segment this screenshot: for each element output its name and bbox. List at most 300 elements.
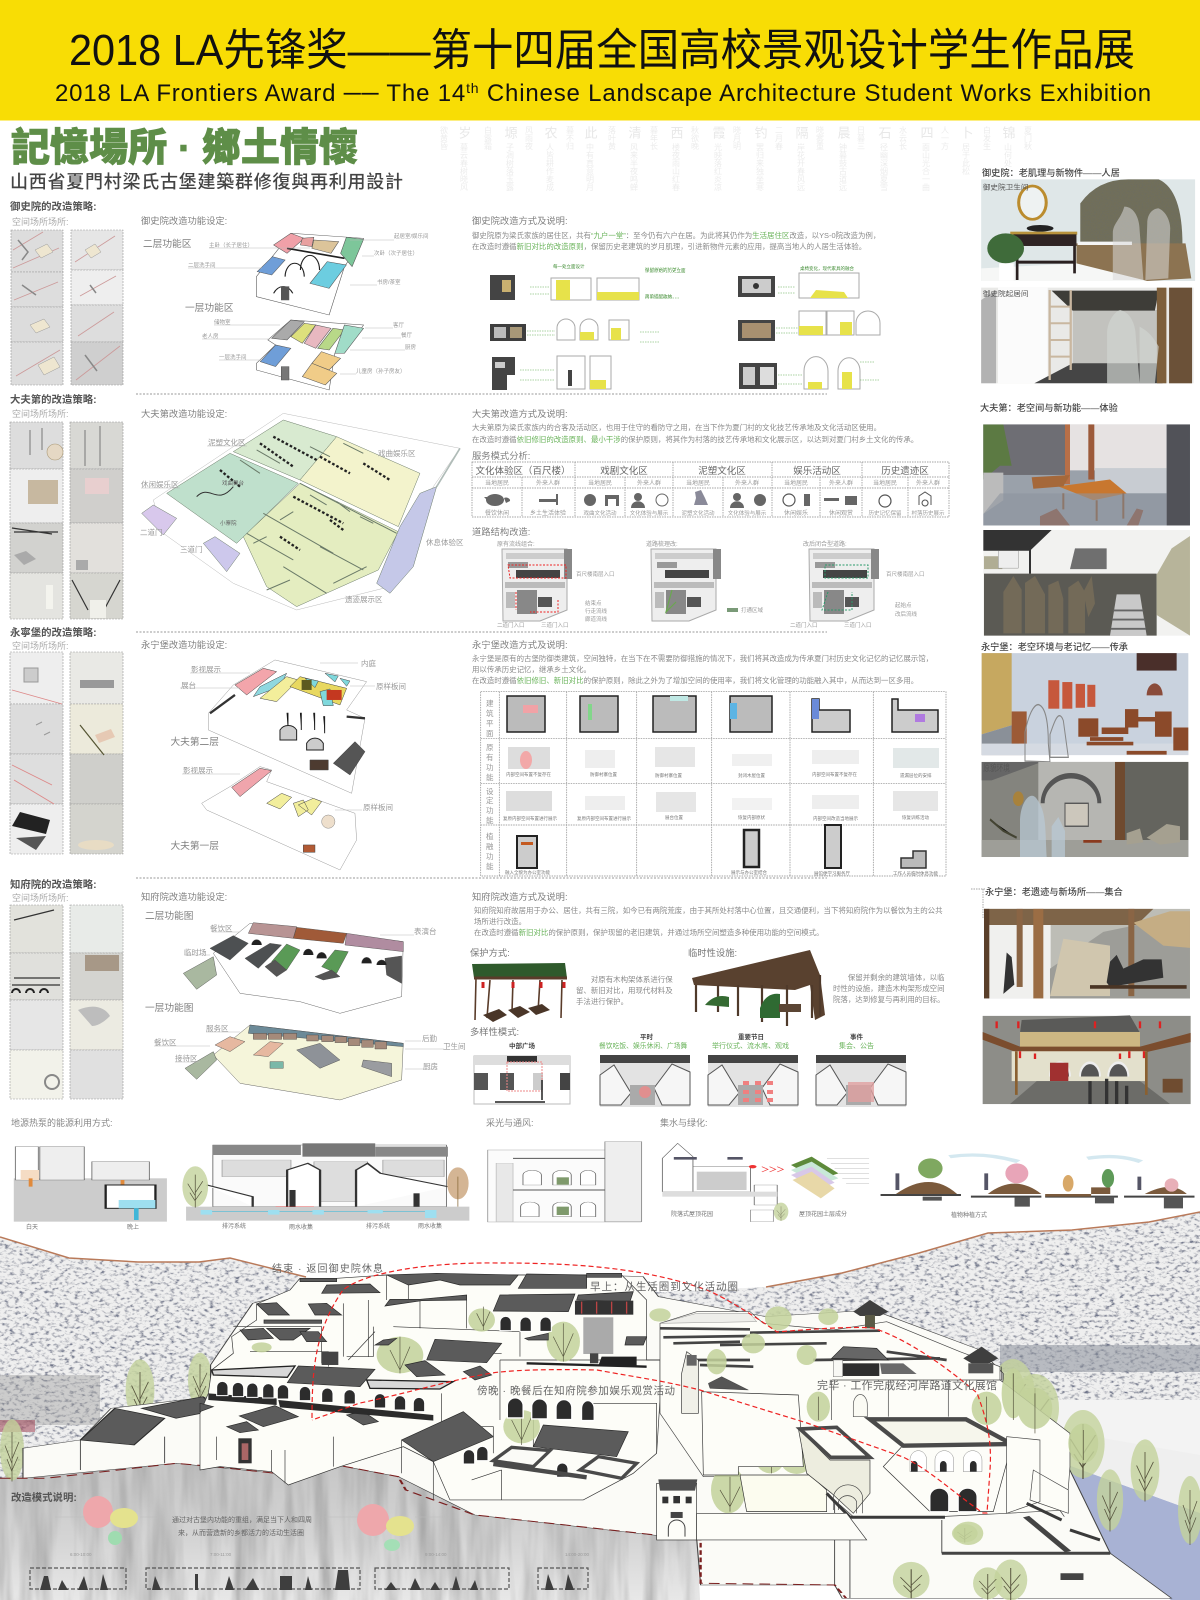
ghost poem background text: 岸花开春风远 xyxy=(796,143,806,192)
ghost poem background text: 暮不归 xyxy=(566,125,574,151)
arched facade xyxy=(910,1451,982,1472)
title: English: Chinese Landscape Architecture Student Works Exhibition xyxy=(479,80,1152,107)
small gate tower xyxy=(657,1483,697,1540)
header banner xyxy=(0,0,1200,120)
永宁堡 explanation xyxy=(472,639,946,877)
body text: 知府院知府故居用于办公、居住，共有三院，如今已有两院荒废，由于其所处村落中心位置，且交通便利，当下将知府院作为以餐饮为主的公共 xyxy=(474,905,943,915)
road plans: 百尺楼南层入口 xyxy=(886,570,925,578)
mode legend: 通过对古堡内功能的重组，满足当下人和四周 xyxy=(172,1515,312,1524)
知府院 function axonometric: 接待区 xyxy=(175,1053,198,1063)
comparison table: 恢复训练活动 xyxy=(902,814,929,821)
central gatehouse xyxy=(832,1347,888,1360)
大夫第 function axonometric: 休闲娱乐区 xyxy=(141,479,179,489)
service model table: 外来人群 xyxy=(637,479,661,487)
heading: 知府院的改造策略: xyxy=(10,878,97,891)
comparison table: 展台位置 xyxy=(665,814,683,821)
axon drawing xyxy=(256,233,364,390)
heading: 大夫第的改造策略: xyxy=(10,393,97,406)
service model table: 文化体验区（百尺楼） xyxy=(475,465,571,477)
大夫第 function axonometric: 二道门 xyxy=(140,527,162,537)
ghost poem background text: 清 xyxy=(626,126,642,139)
大夫第 function axonometric: 三道门 xyxy=(180,544,202,554)
river xyxy=(1064,1465,1200,1600)
comparison table: 防御村寨位置 xyxy=(590,771,617,778)
section: 大夫第 strategy thumbnails: 空间场所场所: xyxy=(12,408,69,419)
御史院 explanation: 在改造时遵循新旧对比的改造原则，保留历史老建筑的岁月肌理，引进新物件元素的应用，提高当地人的人居生活体验。 xyxy=(472,241,866,251)
captions: 雨水收集 xyxy=(418,1222,442,1230)
road plans: 行走流线 xyxy=(585,607,608,615)
rendering: 御史院卫生间: 御史院卫生间 xyxy=(983,183,1028,191)
ghost poem background text: 人一方 xyxy=(940,126,950,151)
road plans: 百尺楼南层入口 xyxy=(576,570,615,578)
service model table: 外来人群 xyxy=(536,479,560,487)
永宁堡 function axonometric: 展台 xyxy=(181,680,196,690)
大夫第 explanation: 改后闭合型道路: xyxy=(803,540,847,548)
ghost poem background text: 二月春 xyxy=(774,126,784,150)
captions: 排污系统 xyxy=(222,1222,246,1230)
rendering: 御史院卫生间: 御史院起居间 xyxy=(983,289,1028,298)
white wall masses xyxy=(200,1273,660,1500)
section: 大夫第 strategy thumbnails xyxy=(10,393,123,619)
御史院 function axonometric: 主卧（长子居住） xyxy=(209,241,253,249)
plan and section diagrams: 保留原始的历史立面 xyxy=(645,267,686,274)
right column renderings xyxy=(980,167,1195,1104)
service model table: 餐饮休闲 xyxy=(485,509,509,517)
ghost poem background text: 隔 xyxy=(794,126,808,139)
service model table: 外来人群 xyxy=(735,479,759,487)
plan and section diagrams: 简单搭配收纳 xyxy=(645,293,672,300)
ghost poem background text: 锦 xyxy=(1000,126,1016,139)
road plans: 二道门入口 xyxy=(790,621,818,629)
大夫第 function axonometric: 小寨院 xyxy=(220,519,237,527)
知府院 function axonometric: 厨房 xyxy=(423,1061,438,1071)
永宁堡 explanation: 在改造时遵循依旧修旧、新旧对比的保护原则，除此之外为了增加空间的使用率，我们将文化管理的功能融入其中，从而达到一区多用。 xyxy=(472,675,918,685)
green main title: 記憶場所 · 鄉土情懷 xyxy=(11,127,358,170)
comparison table: 融 xyxy=(486,841,494,851)
diverse modes: 多样性模式: xyxy=(470,1026,519,1037)
comparison table: 防御村寨位置 xyxy=(655,772,682,779)
service model table: 泥塑文化活动 xyxy=(681,509,715,517)
rock wall base xyxy=(0,1463,700,1600)
ghost poem background text: 中有真意明月 xyxy=(586,142,594,192)
ghost poem background text: 晓月明 xyxy=(732,125,742,151)
village: base mass and left / lower parts xyxy=(0,1275,1172,1600)
renderings: 大夫第 / 永宁堡 xyxy=(982,424,1190,857)
知府院 function axonometric: 餐饮区 xyxy=(210,923,233,933)
captions: 白天 xyxy=(26,1223,38,1231)
title: English: 2018 LA Frontiers Award ── The 14 xyxy=(55,80,466,107)
comparison table: 复原内部空间布置进行展示 xyxy=(503,815,557,822)
永宁堡 function axonometric: 原样板间 xyxy=(376,681,406,691)
大夫第 explanation: 在改造时遵循依旧修旧的改造原则、最小干涉的保护原则，将其作为村落的技艺传承地和文化展示区，以达到对夏门村乡土文化的传承。 xyxy=(472,434,918,444)
comparison table: 功 xyxy=(486,851,494,861)
ghost poem background text: 塬 xyxy=(502,126,518,140)
御史院 function axonometric xyxy=(141,215,429,390)
road plans: 廊道流线 xyxy=(585,615,608,623)
comparison table: 功 xyxy=(486,762,494,772)
dashed fragment beside right column xyxy=(971,889,985,919)
service model table: 外来人群 xyxy=(829,479,853,487)
protection method: 手法进行保护。 xyxy=(576,996,628,1006)
ghost poem background text: 楼夜雨山红春 xyxy=(672,142,680,191)
御史院 function axonometric: 二层功能区 xyxy=(143,237,192,250)
bubble diagrams xyxy=(83,1496,113,1528)
comparison table: 内部空间布置不复存在 xyxy=(812,771,857,778)
大夫第 explanation xyxy=(472,408,949,629)
comparison table: 筑 xyxy=(486,708,494,718)
ghost poem background text: 光映落红炎凉 xyxy=(714,142,722,191)
service model table: 乡土生活体验 xyxy=(530,509,566,517)
大夫第 explanation: 原有流线组合: xyxy=(497,540,535,548)
mountains background xyxy=(0,1212,1200,1480)
ghost poem background text: 岁 xyxy=(456,126,472,139)
background trees xyxy=(0,1353,1200,1545)
rendering heading: 大夫第: 大夫第：老空间与新功能——体验 xyxy=(980,402,1118,413)
大夫第 explanation: 道路结构改造: xyxy=(472,526,530,537)
activity silhouette boxes xyxy=(30,1568,588,1589)
ghost poem background text: 水云长 xyxy=(898,125,908,151)
heading: 永宁堡改造功能设定: xyxy=(141,639,227,650)
ghost poem background text: 暮年长 xyxy=(650,125,658,151)
title: English: th xyxy=(466,80,479,96)
知府院 explanation xyxy=(470,891,945,1107)
comparison table: 内部空间布置不复存在 xyxy=(506,771,551,778)
御史院 function axonometric: 厨房 xyxy=(405,343,417,351)
大夫第 explanation: 服务模式分析: xyxy=(472,450,530,461)
temporary facilities xyxy=(688,947,945,1026)
plan and section diagrams xyxy=(490,263,880,390)
永宁堡 function axonometric: 内庭 xyxy=(361,658,376,668)
ghost poem background text: 此 xyxy=(582,126,598,139)
comparison table: 能 xyxy=(486,772,494,782)
service model table: 休闲娱乐 xyxy=(784,509,808,517)
知府院 function axonometric: 服务区 xyxy=(206,1023,229,1033)
ghost poem background text: 径幽深烟夏雪 xyxy=(880,142,888,192)
heading: 御史院的改造策略: xyxy=(10,200,97,213)
comparison table: 内部空间改造当地展示 xyxy=(813,815,858,822)
rendering heading: 御史院: 御史院：老肌理与新物件——人居 xyxy=(982,167,1120,178)
section drawings xyxy=(14,1142,1194,1222)
mode legend: 来，从而营造新的乡都活力的活动生活圈 xyxy=(178,1528,304,1537)
ghost poem background text: 暮云春树晓风 xyxy=(460,142,468,192)
service model table: 外来人群 xyxy=(916,479,940,487)
service model table: 泥塑文化区 xyxy=(698,465,746,477)
service model table: 戏曲文化活动 xyxy=(583,509,617,517)
heading: 大夫第改造功能设定: xyxy=(141,408,227,419)
road plans: 打通区域 xyxy=(741,606,764,614)
heading: daylight: 采光与通风: xyxy=(486,1117,534,1128)
御史院 function axonometric: 书房/茶室 xyxy=(377,278,401,286)
comparison table: 恢复内部原状 xyxy=(738,814,765,821)
ghost poem background text: 晨 xyxy=(836,126,850,139)
integrated function row: 融入全貌为办公室功能 xyxy=(505,869,550,876)
comparison table: 遗漏层位的安排 xyxy=(900,772,932,779)
大夫第 function axonometric: 戏曲娱乐区 xyxy=(378,448,416,458)
captions: 排污系统 xyxy=(366,1222,390,1230)
大夫第 function axonometric: 戏曲舞台 xyxy=(222,479,245,487)
heading: 永宁堡改造方式及说明: xyxy=(472,639,568,650)
service model table: 文化体验与展示 xyxy=(630,509,669,517)
captions: 院落式屋顶花园 xyxy=(671,1210,713,1218)
captions: 屋顶花园土层成分 xyxy=(799,1210,847,1218)
大夫第 function axonometric: 泥塑文化区 xyxy=(208,437,246,447)
ghost poem background text: 霞 xyxy=(710,126,726,139)
永宁堡 explanation: 用以传承历史记忆，继承乡土文化。 xyxy=(472,664,591,674)
大夫第 function axonometric: 遗迹展示区 xyxy=(345,594,383,604)
title: Chinese: 2018 LA先锋奖——第十四届全国高校景观设计学生作品展 xyxy=(69,26,1135,75)
heading: 御史院改造方式及说明: xyxy=(472,215,568,226)
御史院 function axonometric: 一层洗手间 xyxy=(219,353,247,361)
rendering: 御史院卫生间 xyxy=(981,179,1195,383)
御史院 function axonometric: 老人房 xyxy=(202,332,219,340)
diverse modes: 餐饮吃饭、娱乐休闲、广场舞 xyxy=(599,1041,688,1050)
section: 御史院 strategy thumbnails: 空间场所场所: xyxy=(12,216,69,227)
protection method: 对原有木构架体系进行保 xyxy=(576,974,673,984)
green tree blobs xyxy=(252,1308,580,1443)
service model table: 当地居民 xyxy=(485,479,509,487)
route captions xyxy=(272,1262,997,1397)
renderings: 大夫第 / 永宁堡: 原貌环境 xyxy=(983,762,1010,773)
知府院 explanation: 场所进行改造。 xyxy=(474,916,526,926)
integrated function row: 展示与办公室结合 xyxy=(731,869,767,876)
diverse modes: 集会、公告 xyxy=(839,1041,874,1050)
comparison table: 能 xyxy=(486,815,494,825)
ghost poem background text: 落叶黄 xyxy=(608,125,616,151)
mode legend xyxy=(11,1491,590,1590)
road plans: 结束点 xyxy=(585,599,602,607)
section: 永宁堡 strategy thumbnails: 空间场所场所: xyxy=(12,640,69,651)
set function row xyxy=(506,791,938,812)
temporary facilities: 时性的设施，建造木构架形成空间 xyxy=(833,983,945,993)
御史院 function axonometric: 起居室/娱乐间 xyxy=(394,232,429,240)
知府院 function axonometric: 一层功能图 xyxy=(145,1001,193,1014)
ghost poem background text: 农 xyxy=(542,126,558,139)
heading: geothermal: 地源热泵的能源利用方式: xyxy=(11,1117,113,1128)
gates xyxy=(238,1438,252,1463)
village: central cluster xyxy=(200,1273,660,1500)
section: 永宁堡 strategy thumbnails xyxy=(10,626,123,854)
icons row xyxy=(484,490,931,508)
captions: 植物种植方式 xyxy=(951,1211,987,1219)
captions: 晚上 xyxy=(127,1223,139,1231)
original function row xyxy=(508,747,939,769)
知府院 function axonometric: 餐饮区 xyxy=(154,1037,177,1047)
service model table: 历史记忆保留 xyxy=(868,509,902,517)
知府院 function axonometric: 后勤 xyxy=(422,1033,437,1043)
road plans: 三道门入口 xyxy=(844,621,872,629)
captions: 雨水收集 xyxy=(289,1223,313,1231)
ghost poem background text: 风来半夜鸣蝉 xyxy=(630,143,638,192)
route arcs xyxy=(312,1263,990,1513)
comparison table: 功 xyxy=(486,805,494,815)
plan and section diagrams: 桌椅变化，现代家具的融合 xyxy=(800,265,854,272)
service model table: 休闲观赏 xyxy=(829,509,853,517)
captions xyxy=(26,1210,987,1231)
comparison table: 面 xyxy=(486,729,494,738)
comparison table: 平 xyxy=(486,719,494,728)
永宁堡 function axonometric xyxy=(141,639,406,870)
renderings: 知府院 xyxy=(983,909,1191,1104)
comparison table: 复原内部空间布置进行展示 xyxy=(577,815,631,822)
leader labels xyxy=(188,240,405,374)
御史院 explanation xyxy=(472,215,880,390)
御史院 function axonometric: 客厅 xyxy=(393,321,405,329)
知府院 function axonometric: 二层功能图 xyxy=(145,909,193,922)
route captions: 完毕 · 工作完成经河岸路道文化展馆 xyxy=(817,1378,997,1392)
courtyard rings xyxy=(493,1447,550,1467)
知府院 function axonometric xyxy=(141,891,466,1100)
ghost poem background text: 卜 xyxy=(958,126,974,139)
知府院 explanation: 在改造时遵循新旧对比的保护原则，保护现留的老旧建筑，并通过场所空间塑造多种使用功能的空间模式。 xyxy=(474,927,824,937)
mode legend: 14:00-20:00 xyxy=(565,1552,590,1557)
route captions: 结束 · 返回御史院休息 xyxy=(272,1262,383,1275)
御史院 function axonometric: 一层功能区 xyxy=(185,301,234,314)
axon drawing xyxy=(202,660,367,870)
diverse modes: 中部广场 xyxy=(509,1041,536,1050)
service model table: 当地居民 xyxy=(588,479,612,487)
service model table: 娱乐活动区 xyxy=(793,465,841,477)
section: 知府院 strategy thumbnails: 空间场所场所: xyxy=(12,892,69,903)
comparison table: 有 xyxy=(486,752,494,762)
ghost poem background text: 夏门秋 xyxy=(1024,126,1032,151)
comparison table: 原 xyxy=(486,743,494,752)
ghost poem background text: 秋欲晚 xyxy=(690,125,700,151)
service model table: 当地居民 xyxy=(873,479,897,487)
御史院 function axonometric: 次卧（次子居住） xyxy=(374,249,418,257)
diverse modes: 事件 xyxy=(850,1032,864,1041)
village: right cluster xyxy=(649,1300,1100,1545)
heading: 知府院改造功能设定: xyxy=(141,891,227,902)
arcades xyxy=(212,1366,295,1377)
comparison table: 建 xyxy=(486,698,494,708)
comparison table: 定 xyxy=(486,795,494,805)
roofs xyxy=(387,1273,518,1285)
知府院 function axonometric: 卫生间 xyxy=(443,1041,466,1051)
rendering heading: 知府院: 永宁堡：老遗迹与新场所——集合 xyxy=(985,886,1123,897)
integrated function row xyxy=(505,825,938,877)
service model table: 村落历史展示 xyxy=(911,509,945,517)
ghost poem background text: 钓 xyxy=(752,126,768,139)
service model table: 历史遗迹区 xyxy=(881,465,929,477)
ghost poem background text: 山何处 xyxy=(1004,142,1012,168)
comparison table: 能 xyxy=(486,861,494,871)
ghost poem background text: 白露霜 xyxy=(484,125,492,151)
mode legend: 改造模式说明: xyxy=(11,1491,77,1504)
ghost poem background text: 子凋树落玉露 xyxy=(506,143,514,192)
comparison table xyxy=(481,692,946,877)
diverse modes xyxy=(470,1026,906,1107)
service model table: 当地居民 xyxy=(686,479,710,487)
plans row xyxy=(507,696,938,732)
courtyard blocks xyxy=(798,1428,870,1513)
ghost poem background text: 欲黄昏 xyxy=(440,125,448,151)
subtitle: 山西省夏門村梁氏古堡建築群修復與再利用設計 xyxy=(10,172,403,192)
mode legend: 6:00-10:00 xyxy=(70,1552,92,1557)
dashed section dividers xyxy=(136,394,827,878)
ghost poem background text xyxy=(440,125,1032,192)
heading: 大夫第改造方式及说明: xyxy=(472,408,568,419)
ghost poem background text: 面山光合一曲 xyxy=(922,143,930,192)
知府院 function axonometric: 表演台 xyxy=(414,926,436,936)
integrated function row: 展馆便学习服务厅 xyxy=(814,870,850,877)
ghost poem background text: 人皆耕作麦成 xyxy=(546,143,554,192)
ghost poem background text: 罢归来独坐寒 xyxy=(756,143,764,192)
永宁堡 function axonometric: 影视展示 xyxy=(191,664,221,674)
road plans: 三道门入口 xyxy=(541,621,569,629)
heading: rainwater: 集水与绿化: xyxy=(660,1117,708,1128)
dark gate tower xyxy=(575,1301,633,1315)
road plans xyxy=(497,549,925,629)
section: 知府院 strategy thumbnails xyxy=(10,878,123,1099)
御史院 function axonometric: 餐厅 xyxy=(401,331,413,339)
永宁堡 function axonometric: 大夫第一层 xyxy=(170,839,219,852)
大夫第 function axonometric xyxy=(140,408,464,610)
ghost poem background text: 西 xyxy=(668,126,684,139)
service model table xyxy=(472,462,949,517)
temporary facilities: 临时性设施: xyxy=(688,947,737,958)
rendering heading: 永宁堡: 永宁堡：老空环境与老记忆——传承 xyxy=(981,641,1128,652)
road plans: 改后流线 xyxy=(895,610,918,618)
mode legend: 9:00-14:00 xyxy=(425,1552,447,1557)
pagodas xyxy=(853,1300,888,1316)
ghost poem background text: 居于此松 xyxy=(962,143,970,176)
comparison table: 封闭木屋位置 xyxy=(738,772,765,779)
white walls xyxy=(702,1392,803,1475)
sustainability strip xyxy=(11,1117,1194,1231)
service model table: 文化体验与展示 xyxy=(728,509,767,517)
大夫第 explanation: 道路梳理改: xyxy=(646,540,678,548)
comparison table: 设 xyxy=(486,786,494,796)
service model table: 当地居民 xyxy=(784,479,808,487)
section: 御史院 strategy thumbnails xyxy=(10,200,123,385)
御史院 function axonometric: 储物室 xyxy=(214,318,231,326)
diverse modes: 平时 xyxy=(640,1032,654,1041)
heading: 御史院改造功能设定: xyxy=(141,215,227,226)
protection method xyxy=(470,947,673,1022)
御史院 function axonometric: 二层洗手间 xyxy=(188,261,216,269)
integrated function row: 工作人员临时休息功能 xyxy=(893,870,938,877)
plan and section diagrams: 每一处立面设计 xyxy=(553,263,585,270)
ghost poem background text: 钟暮鼓古道远 xyxy=(838,142,848,192)
comparison table: 植 xyxy=(486,831,494,841)
永宁堡 function axonometric: 原样板间 xyxy=(363,802,393,812)
rendering: 御史院起居间 xyxy=(981,288,1194,383)
ghost poem background text: 晓雾重 xyxy=(816,125,824,150)
大夫第 function axonometric: 休息体验区 xyxy=(426,537,464,547)
ghost poem background text: 白发生 xyxy=(982,125,992,150)
service model table: 戏剧文化区 xyxy=(600,465,648,477)
heading: 知府院改造方式及说明: xyxy=(472,891,568,902)
body text: 大夫第原为梁氏家族内的合客及活动区，也用于住守的看防守之用，在当下作为夏门村的文化技艺传承地及文化活动区使用。 xyxy=(472,422,881,432)
road plans: 二道门入口 xyxy=(497,621,525,629)
back terrace xyxy=(660,1312,1070,1517)
御史院 function axonometric: 儿童房（孙子房友） xyxy=(356,367,406,375)
bottom panorama xyxy=(0,1212,1200,1600)
永宁堡 function axonometric: 大夫第二层 xyxy=(170,735,219,748)
protection method: 保护方式: xyxy=(470,947,510,958)
diverse modes: 举行仪式、流水席、观戏 xyxy=(712,1041,789,1050)
ghost poem background text: 日暮三 xyxy=(856,126,866,150)
知府院 function axonometric: 临时场 xyxy=(184,947,207,957)
road plans: 起始点 xyxy=(895,601,912,609)
temporary facilities: 院落，达到修复与再利用的目标。 xyxy=(833,994,945,1004)
diverse modes: 重要节日 xyxy=(738,1032,764,1041)
mode legend: 7:00-11:00 xyxy=(210,1552,232,1557)
ghost poem background text: 石 xyxy=(876,126,892,139)
temporary facilities: 保留并剩余的建筑墙体，以临 xyxy=(833,972,945,982)
body text: 御史院原为梁氏家族的居住区，共有“九户一堂”：至今仍有六户在居。为此将其仍作为生活居住区改造，以YS-0院改造为例， xyxy=(472,230,880,240)
project title xyxy=(10,127,403,192)
